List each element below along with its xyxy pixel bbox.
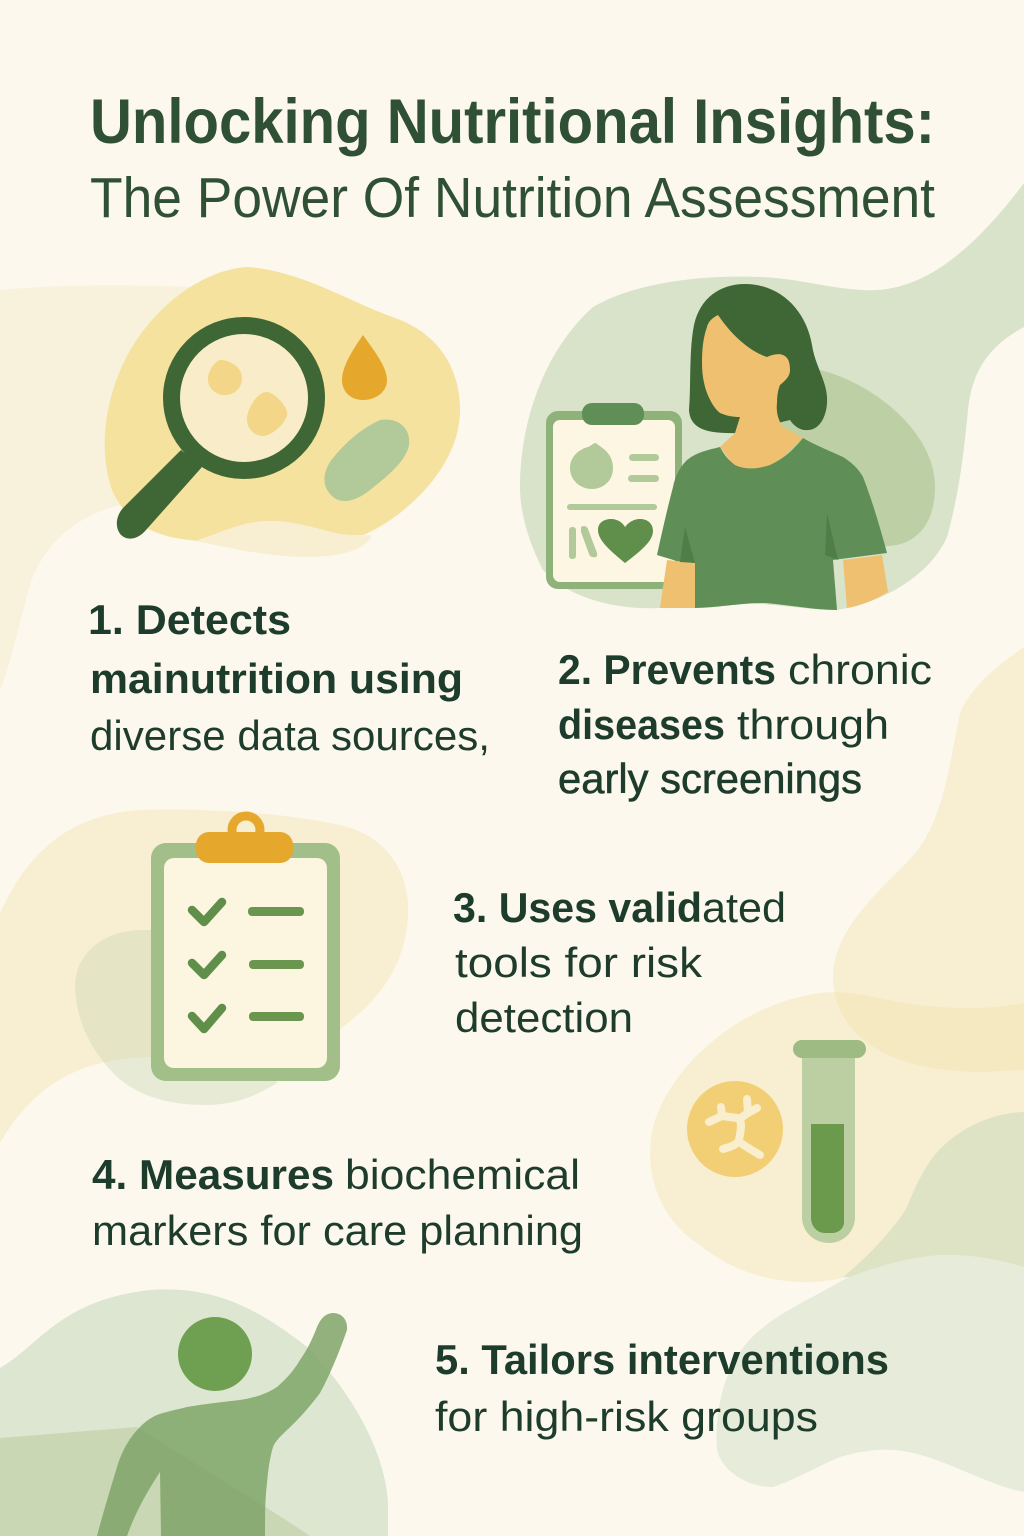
food piece two (247, 392, 287, 436)
tube body (802, 1052, 855, 1243)
tube rim (793, 1040, 866, 1058)
text block: point 3: ated (702, 884, 786, 931)
text block: point 2: diseases (558, 701, 725, 748)
text block: point 5: for high-risk groups (435, 1393, 818, 1440)
checklist lines (248, 907, 304, 1021)
record blob (570, 443, 613, 489)
background blob: darker green behind woman (780, 370, 935, 560)
background blob: test tube cream (650, 992, 1024, 1282)
title (90, 87, 935, 230)
clipboard paper (553, 420, 675, 582)
background blob: clipboard green (75, 930, 280, 1105)
magnifier handle (117, 450, 202, 539)
background blob: lower left darker green (0, 1427, 310, 1536)
background blob: woman green (520, 183, 1024, 610)
background blob: left cream (0, 285, 190, 690)
background blob: lower left green (0, 1289, 388, 1536)
left arm (660, 560, 695, 608)
clipboard frame (546, 411, 682, 589)
background blob: lower right olive (843, 1112, 1024, 1280)
background blob: cream over yellow base (195, 521, 372, 557)
right arm (843, 555, 888, 608)
clipboard frame (151, 843, 340, 1081)
background blob: yellow icon base (105, 267, 460, 541)
record heart (598, 519, 653, 563)
text block: point 5 (435, 1336, 889, 1440)
icon: clipboard with health record (546, 403, 682, 589)
text block: point 2 (558, 646, 932, 802)
molecule branches (709, 1099, 760, 1155)
icon: woman (657, 284, 888, 610)
record lines (567, 454, 659, 559)
text block: point 1: diverse data sources, (90, 712, 490, 759)
text block: point 3: tools for risk (455, 939, 703, 986)
food piece one (208, 360, 242, 395)
title line 1: Unlocking Nutritional Insights: (90, 87, 935, 157)
text block: point 1 (88, 596, 490, 759)
molecule disc (687, 1081, 783, 1177)
icon: checklist clipboard (151, 816, 340, 1081)
magnifier lens (172, 326, 316, 470)
text block: point 2: chronic (788, 646, 932, 693)
person body (97, 1313, 347, 1536)
hair (689, 284, 827, 433)
text block: point 3 (453, 884, 786, 1041)
text block: point 2: early screenings (558, 755, 862, 802)
skin: face and neck (702, 315, 803, 470)
icon: magnifying glass with food (117, 326, 409, 539)
text block: point 4: 4. Measures (92, 1151, 334, 1198)
green vegetable (324, 420, 409, 501)
clipboard paper (164, 858, 327, 1068)
text block: point 4 (92, 1151, 583, 1254)
tube liquid (811, 1124, 844, 1233)
text block: point 1: mainutrition using (90, 655, 463, 702)
sleeve creases (680, 513, 838, 563)
clipboard clip (196, 832, 293, 863)
text block: point 2: through (737, 701, 889, 748)
text block: point 3: 3. Uses valid (453, 884, 702, 931)
person head (178, 1317, 252, 1391)
background blob: lower right pale green (717, 1255, 1024, 1492)
background blob: right yellow (833, 647, 1024, 1072)
oil drop (342, 335, 387, 400)
icon: test tube and molecule (687, 1040, 866, 1243)
check marks (192, 902, 222, 1029)
background blob: clipboard cream (0, 810, 408, 1143)
icon: person raising arm (97, 1313, 347, 1536)
text block: point 1: 1. Detects (88, 596, 291, 643)
title line 2: The Power Of Nutrition Assessment (90, 166, 935, 230)
clipboard ring (232, 816, 260, 844)
text block: point 3: detection (455, 994, 633, 1041)
text block: point 4: markers for care planning (92, 1207, 583, 1254)
text block: point 5: 5. Tailors interventions (435, 1336, 889, 1383)
clipboard clip (582, 403, 644, 425)
text block: point 4: biochemical (345, 1151, 580, 1198)
text block: point 2: 2. Prevents (558, 646, 776, 693)
shirt (657, 438, 887, 610)
